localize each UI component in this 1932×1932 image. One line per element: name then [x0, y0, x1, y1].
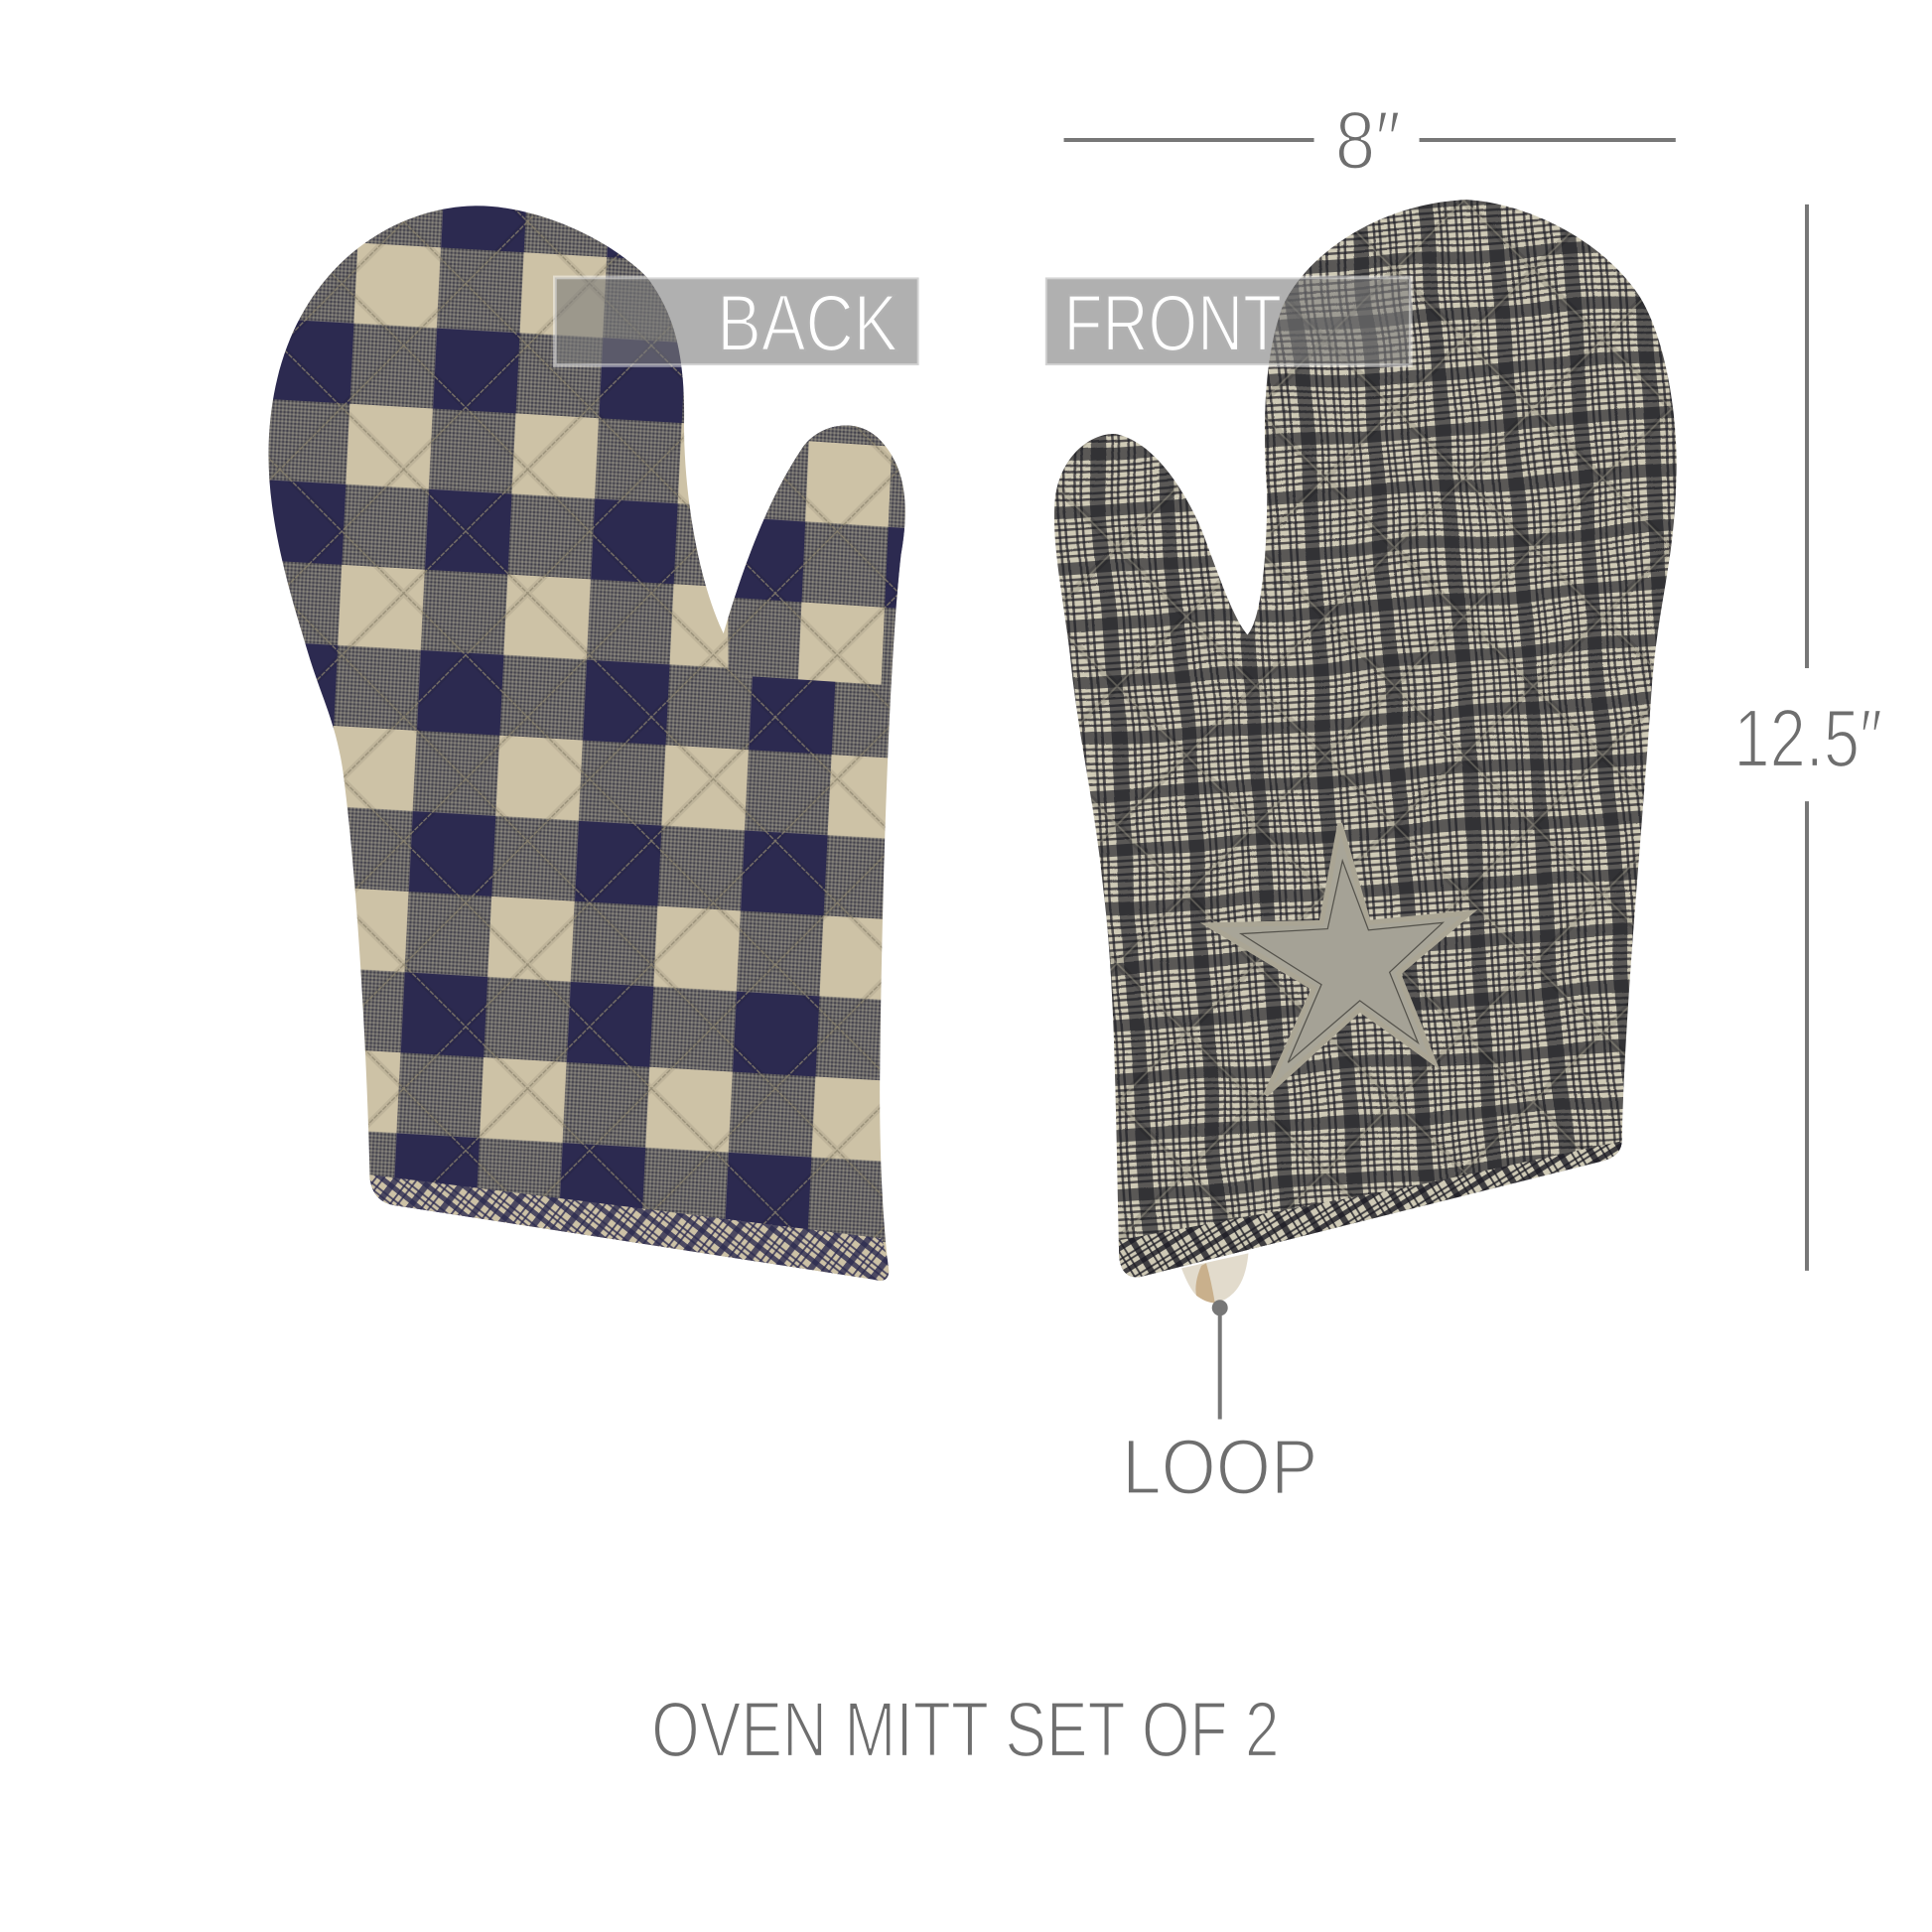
icon: fabric hanging loop [1181, 1253, 1248, 1303]
infographic canvas [268, 112, 1880, 1756]
label: FRONT: FRONT [1064, 279, 1282, 368]
dimension: height 12.5 inches: 12.5″ [1733, 693, 1882, 784]
fabric: thumb piece of buffalo check [729, 425, 905, 685]
fabric: navy and tan buffalo check [268, 206, 905, 1281]
quilting stitches [268, 209, 899, 1275]
binding: plaid cuff [1118, 1141, 1622, 1277]
binding: plaid cuff [369, 1174, 890, 1281]
dimension: width 8 inches: 8″ [1335, 95, 1401, 187]
callout: loop: LOOP [1122, 1423, 1317, 1510]
quilting stitches [1056, 200, 1674, 1251]
callout: loop [1122, 1300, 1317, 1510]
label: BACK: BACK [717, 279, 897, 368]
label: BACK [555, 277, 919, 368]
panel: back mitt with buffalo check [268, 206, 905, 1281]
star applique [1208, 824, 1470, 1095]
panel: front mitt with plaid and star [1054, 200, 1677, 1277]
fabric: small plaid [1054, 200, 1677, 1277]
title: OVEN MITT SET OF 2 [651, 1686, 1280, 1773]
